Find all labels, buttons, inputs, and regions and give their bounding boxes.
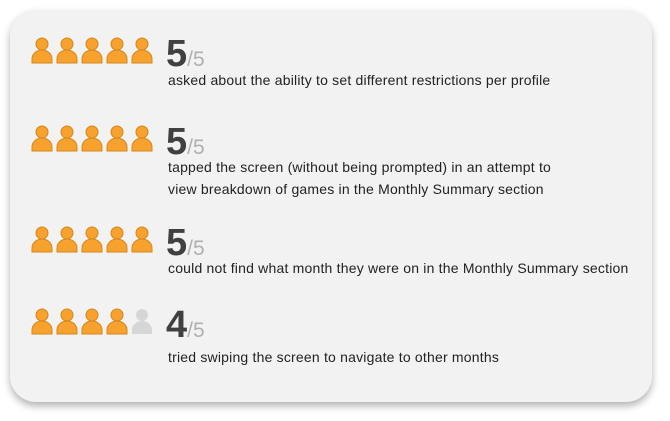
row 4 icons	[32, 308, 152, 334]
row 1 text: asked about the ability to set different restrictions per profile	[168, 72, 550, 88]
row 2 text	[168, 159, 551, 197]
row 2 text: tapped the screen (without being prompted) in an attempt to	[168, 159, 551, 175]
row 2 icons	[32, 126, 152, 152]
row 4 number: 4/5	[166, 304, 205, 346]
row 1 number: 5/5	[166, 33, 205, 75]
row 2 number: 5/5	[166, 121, 205, 163]
row 3 icons	[32, 226, 152, 252]
row 2 text: view breakdown of games in the Monthly Summary section	[168, 181, 544, 197]
row 4 text: tried swiping the screen to navigate to other months	[168, 349, 499, 365]
row 1 icons	[32, 38, 152, 64]
row 3 text: could not find what month they were on in the Monthly Summary section	[168, 260, 628, 276]
row 3 number: 5/5	[166, 222, 205, 264]
